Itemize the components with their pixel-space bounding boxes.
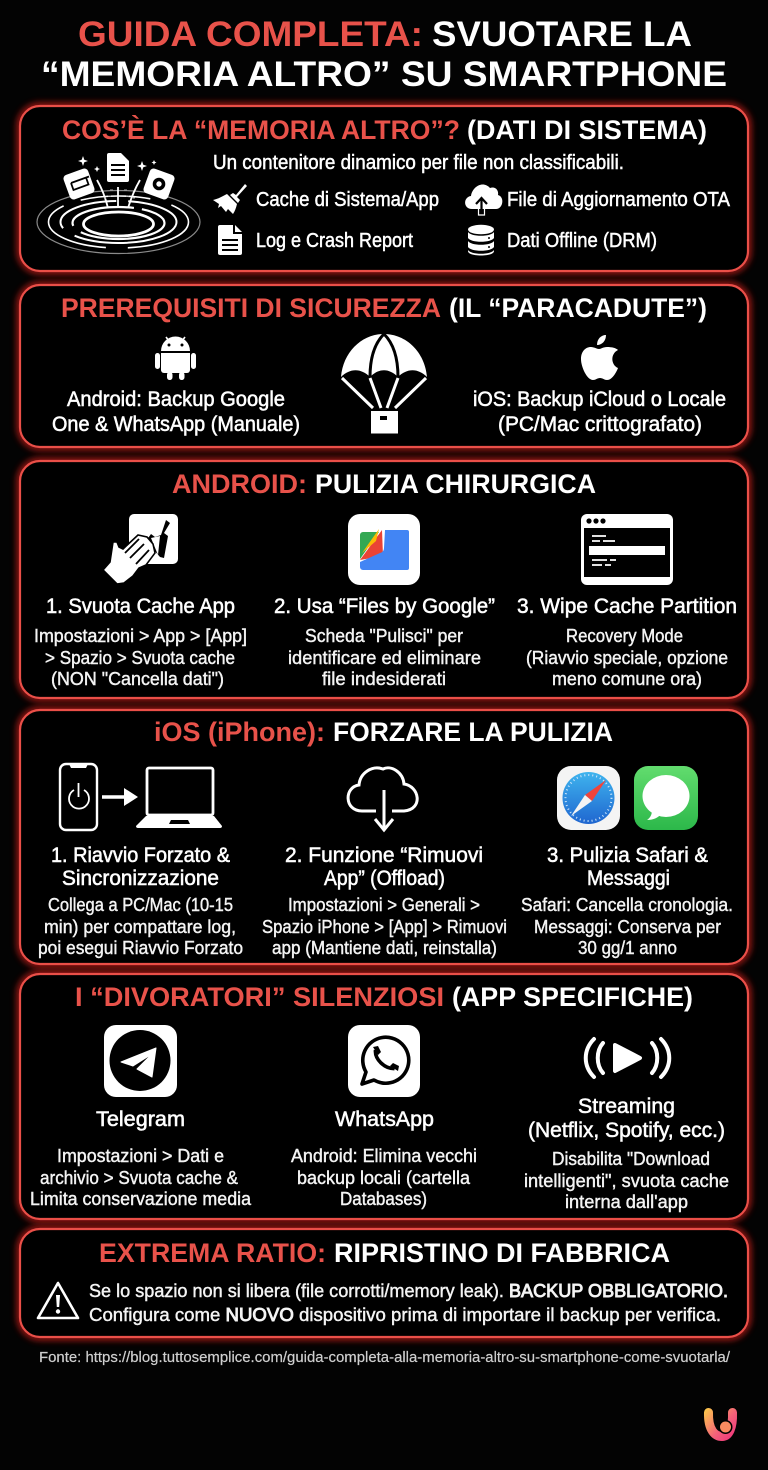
text: extrema ratio body: Se lo spazio non si libera (file corrotti/memory leak). BACKUP OBBLIGATORIO. xyxy=(89,1281,728,1301)
step 1: riavvio forzato: min) per compattare log, xyxy=(44,917,236,937)
text: android backup: One & WhatsApp (Manuale) xyxy=(52,413,300,436)
text: ios backup: iOS: Backup iCloud o Locale xyxy=(473,388,726,411)
icon: android xyxy=(155,336,196,380)
step 2: rimuovi app xyxy=(262,844,507,958)
heading: ios: FORZARE LA PULIZIA xyxy=(333,717,613,747)
column: telegram: Telegram xyxy=(96,1108,185,1131)
column: streaming: Streaming xyxy=(578,1095,675,1118)
panel: extrema ratio xyxy=(20,1229,748,1337)
heading: extrema ratio: EXTREMA RATIO: xyxy=(99,1238,326,1268)
step 1: svuota cache: (NON "Cancella dati") xyxy=(51,669,224,689)
step 3: safari e messaggi xyxy=(521,844,733,958)
column: telegram xyxy=(30,1108,252,1209)
column: streaming xyxy=(524,1095,729,1212)
logo xyxy=(708,1412,733,1436)
panel: android pulizia chirurgica xyxy=(20,461,748,698)
step 3: wipe cache partition: Recovery Mode xyxy=(566,626,683,646)
step 1: svuota cache xyxy=(34,595,247,689)
column: whatsapp xyxy=(291,1108,477,1209)
title: SVUOTARE LA xyxy=(432,15,692,54)
heading: memoria altro: (DATI DI SISTEMA) xyxy=(467,115,707,145)
icon: recovery window xyxy=(581,514,673,585)
step 2: files by google: 2. Usa “Files by Google” xyxy=(274,595,495,618)
icon: broom xyxy=(213,184,247,214)
step 1: riavvio forzato: 1. Riavvio Forzato & xyxy=(51,844,230,867)
text: ios backup xyxy=(473,388,726,436)
label: OTA: File di Aggiornamento OTA xyxy=(507,189,731,211)
heading: android xyxy=(172,469,596,499)
title xyxy=(41,15,727,94)
column: telegram: archivio > Svuota cache & xyxy=(40,1168,238,1188)
step 2: rimuovi app: Impostazioni > Generali > xyxy=(288,895,480,915)
icon: document xyxy=(218,225,242,255)
column: whatsapp: Databases) xyxy=(340,1189,427,1209)
title: GUIDA COMPLETA: xyxy=(78,15,423,54)
label: cache: Cache di Sistema/App xyxy=(256,189,439,211)
heading: android: ANDROID: xyxy=(172,469,307,499)
heading: divoratori: (APP SPECIFICHE) xyxy=(452,982,693,1012)
text: android backup: Android: Backup Google xyxy=(67,388,285,411)
step 3: wipe cache partition: (Riavvio speciale, opzione xyxy=(526,648,728,668)
column: streaming: intelligenti", svuota cache xyxy=(524,1171,729,1191)
icon: vortex with files xyxy=(37,153,200,254)
step 2: rimuovi app: 2. Funzione “Rimuovi xyxy=(285,844,483,867)
label: log: Log e Crash Report xyxy=(256,230,413,252)
heading: android: PULIZIA CHIRURGICA xyxy=(315,469,596,499)
heading: ios xyxy=(154,717,613,747)
step 2: files by google xyxy=(274,595,495,689)
heading: extrema ratio: RIPRISTINO DI FABBRICA xyxy=(334,1238,670,1268)
step 1: svuota cache: Impostazioni > App > [App] xyxy=(34,626,247,646)
step 3: wipe cache partition: 3. Wipe Cache Partition xyxy=(517,595,737,618)
panel: prerequisiti di sicurezza xyxy=(20,285,748,447)
step 1: svuota cache: > Spazio > Svuota cache xyxy=(45,648,235,668)
icon: apple xyxy=(581,335,618,380)
step 3: wipe cache partition xyxy=(517,595,737,689)
text: android backup xyxy=(52,388,300,436)
label: offline: Dati Offline (DRM) xyxy=(507,230,657,252)
icon: database xyxy=(468,225,494,256)
panel: divoratori silenziosi xyxy=(20,974,748,1219)
heading: prerequisiti: PREREQUISITI DI SICUREZZA xyxy=(61,293,441,323)
step 2: files by google: Scheda "Pulisci" per xyxy=(305,626,463,646)
step 2: rimuovi app: Spazio iPhone > [App] > Rimuovi xyxy=(262,917,507,937)
icon: cloud upload xyxy=(465,184,502,215)
step 2: rimuovi app: App” (Offload) xyxy=(324,867,445,890)
column: telegram: Limita conservazione media xyxy=(30,1189,252,1209)
heading: ios: iOS (iPhone): xyxy=(154,717,325,747)
icon: parachute xyxy=(341,334,427,434)
panel: ios forzare la pulizia xyxy=(20,710,748,964)
panel: cos'è la memoria altro xyxy=(20,106,748,271)
column: streaming: Disabilita "Download xyxy=(552,1149,710,1169)
text: definition: Un contenitore dinamico per file non classificabili. xyxy=(213,152,624,174)
heading: divoratori xyxy=(75,982,693,1012)
step 3: safari e messaggi: Safari: Cancella cronologia. xyxy=(521,895,733,915)
icon: cloud download xyxy=(348,768,417,830)
icon: files by google xyxy=(348,514,420,585)
icon: phone to laptop xyxy=(60,764,222,830)
icon: messages xyxy=(634,766,698,830)
text: extrema ratio body xyxy=(89,1281,728,1325)
column: streaming: interna dall'app xyxy=(565,1192,688,1212)
step 3: safari e messaggi: 30 gg/1 anno xyxy=(578,938,677,958)
heading: memoria altro: COS’È LA “MEMORIA ALTRO”? xyxy=(62,114,460,145)
step 1: riavvio forzato: Sincronizzazione xyxy=(62,867,219,890)
icon: whatsapp xyxy=(348,1025,420,1097)
step 1: riavvio forzato: poi esegui Riavvio Forzato xyxy=(38,938,243,958)
heading: prerequisiti: (IL “PARACADUTE”) xyxy=(449,293,707,323)
heading: extrema ratio xyxy=(99,1238,670,1268)
column: telegram: Impostazioni > Dati e xyxy=(57,1146,224,1166)
icon: warning triangle xyxy=(38,1283,78,1318)
step 1: svuota cache: 1. Svuota Cache App xyxy=(46,595,235,618)
column: streaming: (Netflix, Spotify, ecc.) xyxy=(528,1119,725,1142)
column: whatsapp: Android: Elimina vecchi xyxy=(291,1146,477,1166)
step 2: files by google: file indesiderati xyxy=(322,669,446,689)
step 3: safari e messaggi: 3. Pulizia Safari & xyxy=(547,844,708,867)
step 1: riavvio forzato: Collega a PC/Mac (10-15 xyxy=(48,895,233,915)
heading: divoratori: I “DIVORATORI” SILENZIOSI xyxy=(75,982,444,1012)
step 3: safari e messaggi: Messaggi: Conserva per xyxy=(534,917,721,937)
step 3: safari e messaggi: Messaggi xyxy=(587,867,670,890)
heading: prerequisiti xyxy=(61,293,707,323)
text: extrema ratio body: Configura come NUOVO dispositivo prima di importare il backup per verifica. xyxy=(89,1305,721,1325)
icon: telegram xyxy=(104,1025,177,1097)
column: whatsapp: backup locali (cartella xyxy=(297,1168,471,1188)
icon: streaming xyxy=(586,1039,669,1077)
step 2: files by google: identificare ed eliminare xyxy=(288,648,481,668)
heading: memoria altro xyxy=(62,114,707,145)
text: ios backup: (PC/Mac crittografato) xyxy=(498,413,702,436)
source line: Fonte: https://blog.tuttosemplice.com/guida-completa-alla-memoria-altro-su-smartphone-come-svuotarla/ xyxy=(39,1349,731,1366)
icon: hand with brush xyxy=(103,514,178,584)
icon: safari xyxy=(557,766,620,830)
step 2: rimuovi app: app (Mantiene dati, reinstalla) xyxy=(272,938,497,958)
step 1: riavvio forzato xyxy=(38,844,243,958)
column: whatsapp: WhatsApp xyxy=(335,1108,434,1131)
step 3: wipe cache partition: meno comune ora) xyxy=(552,669,702,689)
title: “MEMORIA ALTRO” SU SMARTPHONE xyxy=(41,55,727,94)
